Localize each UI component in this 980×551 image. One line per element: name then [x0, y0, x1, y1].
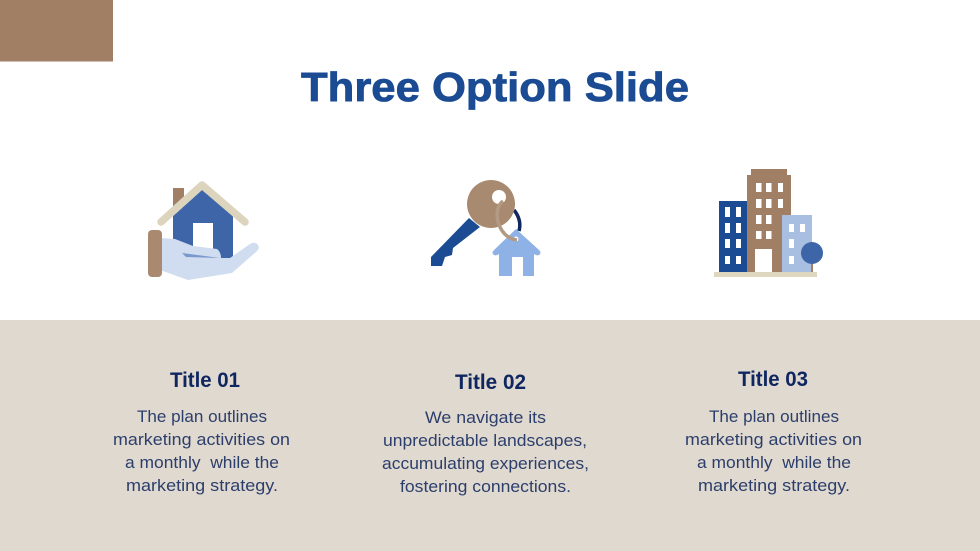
description: option 2: We navigate its	[425, 408, 546, 427]
description: option 1: marketing activities on	[113, 430, 290, 449]
description: option 3	[685, 407, 862, 495]
corner block	[0, 0, 113, 62]
heading: Title 02: Title 02	[455, 371, 526, 394]
description: option 1: The plan outlines	[137, 407, 267, 426]
text block: option 2	[382, 371, 589, 496]
description: option 2: accumulating experiences,	[382, 454, 589, 473]
text block: option 1	[113, 369, 290, 495]
text block: option 3	[685, 368, 862, 495]
description: option 2	[382, 408, 589, 496]
description: option 3: marketing strategy.	[698, 476, 850, 495]
icon: house in hand	[148, 185, 259, 280]
description: option 3: a monthly while the	[697, 453, 851, 472]
description: option 1: a monthly while the	[125, 453, 279, 472]
heading: Title 03: Title 03	[738, 368, 808, 391]
description: option 1	[113, 407, 290, 495]
description: option 3: The plan outlines	[709, 407, 839, 426]
icon: city buildings	[714, 169, 823, 277]
description: option 3: marketing activities on	[685, 430, 862, 449]
heading: Title 01: Title 01	[170, 369, 240, 392]
title: Three Option Slide	[301, 64, 689, 110]
icon: key with house fob	[431, 180, 540, 276]
description: option 2: fostering connections.	[400, 477, 571, 496]
panel: bottom band	[0, 320, 980, 551]
description: option 1: marketing strategy.	[126, 476, 278, 495]
description: option 2: unpredictable landscapes,	[383, 431, 587, 450]
